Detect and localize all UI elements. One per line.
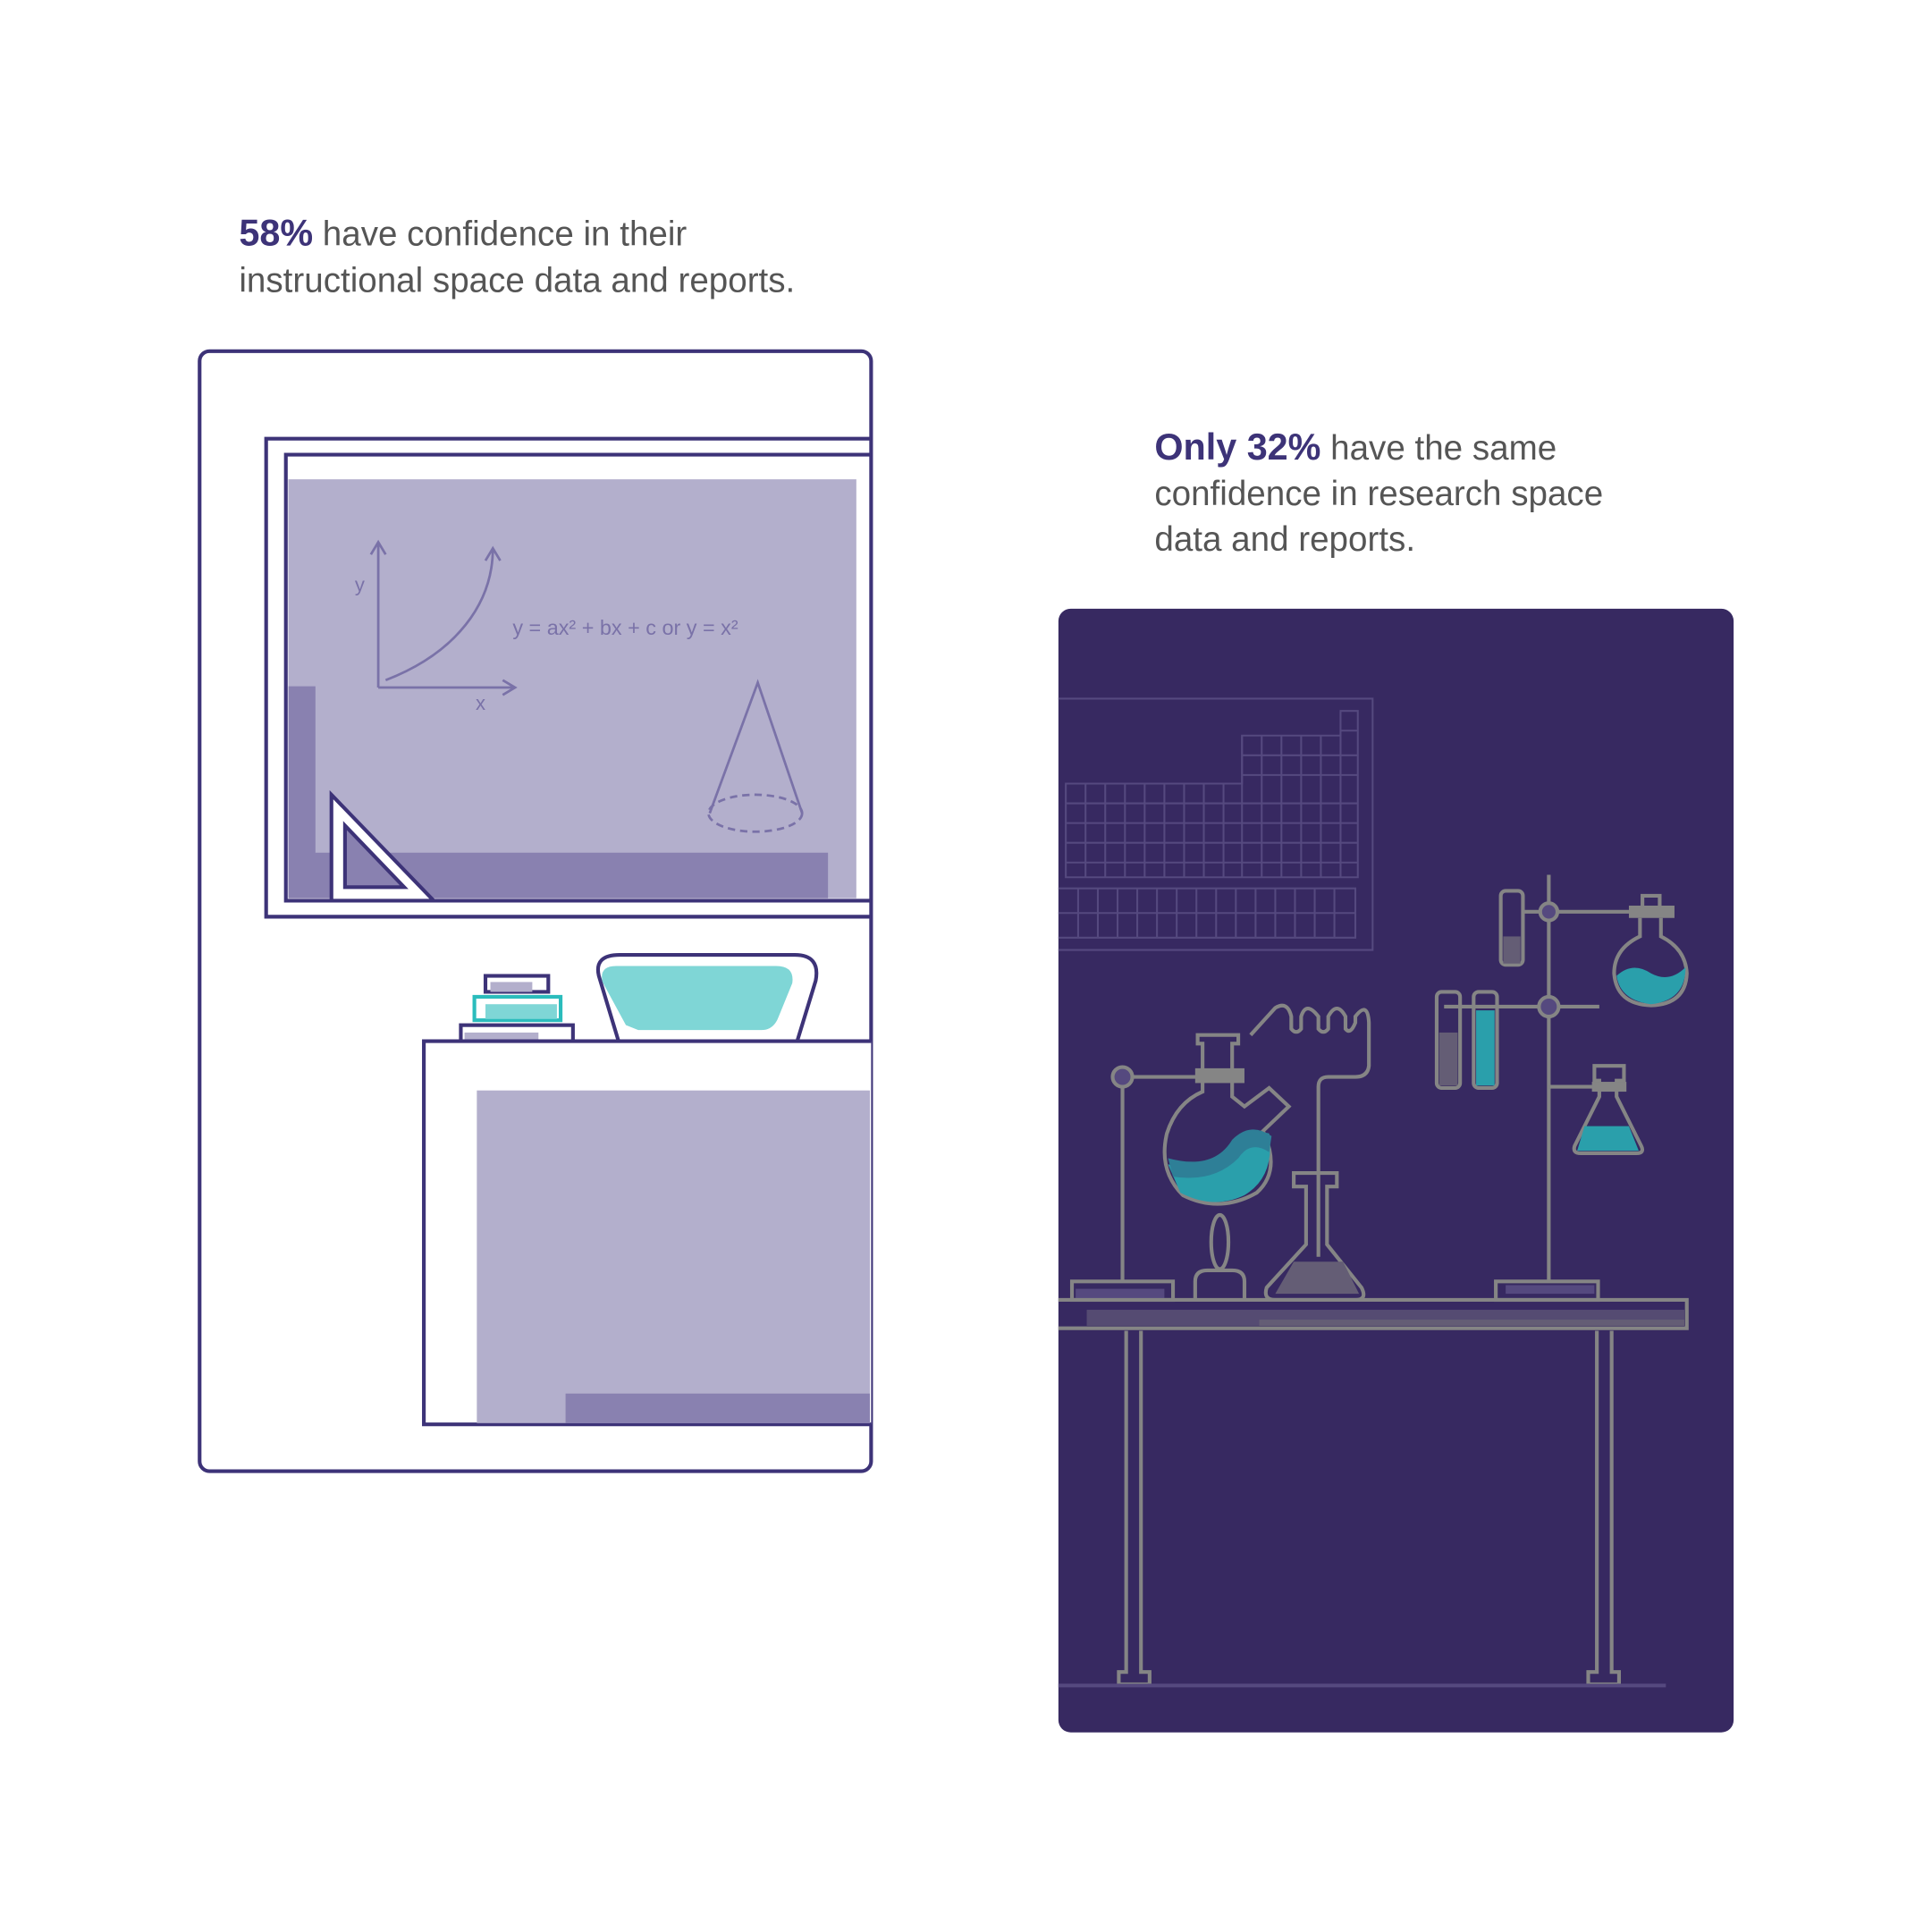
- conical flask: [1266, 1173, 1363, 1300]
- chalkboard: y = ax² + bx + c or y = x²: [512, 616, 738, 639]
- small conical flask: [1574, 1066, 1642, 1153]
- books: [460, 976, 573, 1042]
- burner: [1211, 1215, 1228, 1270]
- desk: [424, 1042, 871, 1424]
- panel: classroom: [199, 351, 871, 1472]
- text block: 58%: [239, 212, 795, 300]
- graph: [371, 542, 802, 831]
- tube: [1251, 1006, 1369, 1257]
- panel: lab: [1059, 609, 1734, 1733]
- chalkboard: x: [476, 692, 485, 714]
- text block: 58%: 58% have confidence in their: [239, 212, 687, 253]
- text block: 32%: Only 32% have the same: [1154, 426, 1557, 468]
- text block: 32%: data and reports.: [1154, 520, 1415, 559]
- right stand: [1548, 875, 1550, 1281]
- text block: 58%: instructional space data and reports.: [239, 262, 795, 300]
- round flask: [1165, 1035, 1289, 1204]
- basket: [598, 955, 816, 1042]
- left stand: [1121, 1085, 1124, 1281]
- periodic table: [1059, 698, 1372, 950]
- right round flask: [1614, 918, 1687, 1006]
- chalkboard: [266, 439, 871, 916]
- set square: [332, 795, 434, 900]
- lab equipment: [1059, 875, 1687, 1685]
- text block: 32%: [1154, 426, 1603, 559]
- test tubes: [1501, 890, 1523, 965]
- table: [1059, 1300, 1687, 1329]
- chalkboard: y: [355, 574, 365, 596]
- text block: 32%: confidence in research space: [1154, 475, 1603, 513]
